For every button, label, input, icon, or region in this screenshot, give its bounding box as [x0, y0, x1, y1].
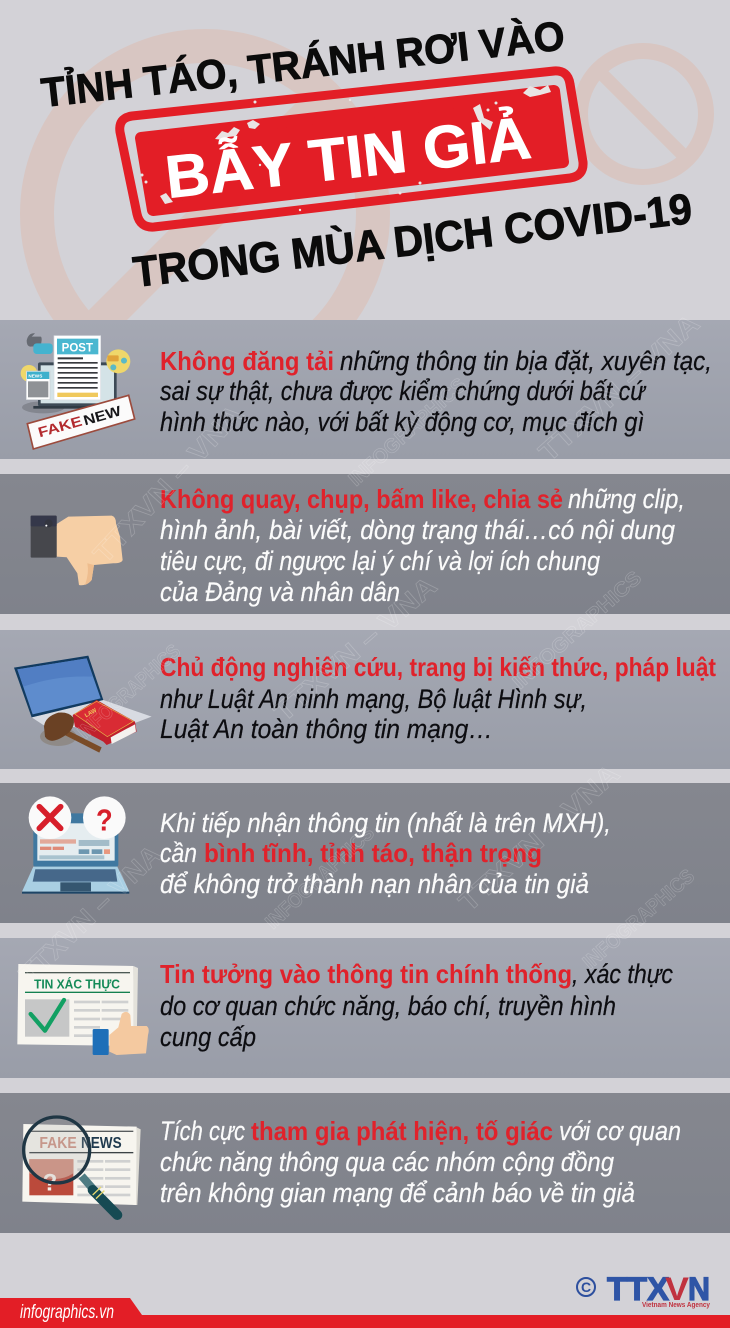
- watermarks: INFOGRAPHICS: [261, 822, 379, 934]
- panel 4 text: để không trở thành nạn nhân của tin giả: [160, 869, 589, 899]
- watermarks: INFOGRAPHICS: [345, 374, 471, 491]
- icon: X badge: [29, 796, 71, 839]
- watermarks: TTXVN – VNA: [268, 570, 443, 728]
- panel 5 text: Tin tưởng vào thông tin chính thống: [160, 959, 572, 989]
- watermarks: INFOGRAPHICS: [74, 640, 185, 744]
- icon: thumbs down: [31, 516, 123, 585]
- logo: TTXVN: N: [688, 1271, 710, 1307]
- icon: small prohibition sign: [580, 51, 706, 177]
- watermarks: INFOGRAPHICS: [509, 567, 646, 694]
- panel 2: no sharing: [0, 474, 730, 614]
- icon: fake news post: FAKE: [36, 413, 84, 440]
- red stamp: [120, 71, 583, 227]
- icon: magnifier over fake news paper: FAKE: [39, 1135, 77, 1152]
- panel 3 text: Luật An toàn thông tin mạng…: [160, 714, 493, 744]
- panel 2 text: hình ảnh, bài viết, dòng trạng thái…có nội dung: [160, 515, 675, 545]
- watermarks: TTXVN – VNA: [87, 399, 249, 569]
- panel 3 text: [160, 652, 716, 744]
- panel 2 text: những clip,: [568, 484, 685, 514]
- panel 6 text: tham gia phát hiện, tố giác: [251, 1116, 553, 1146]
- icon: verified newspaper with thumbs up: [17, 964, 149, 1055]
- stamp text: BẪY TIN GIẢ: [162, 104, 534, 211]
- logo: TTXVN: [577, 1271, 711, 1309]
- logo: TTXVN: TTX: [607, 1271, 670, 1307]
- icon: magnifier over fake news paper: ?: [43, 1170, 57, 1197]
- icon: question badge: ?: [96, 804, 113, 838]
- panel 6 text: chức năng thông qua các nhóm cộng đồng: [160, 1147, 614, 1177]
- logo: TTXVN: V: [665, 1271, 690, 1307]
- panel 4 text: bình tĩnh, tỉnh táo, thận trọng: [204, 838, 542, 868]
- icon: laptop, law book and gavel: LAW: [84, 707, 98, 719]
- icon: large prohibition sign: [37, 46, 373, 382]
- title line 1: TỈNH TÁO, TRÁNH RƠI VÀO: [39, 13, 567, 116]
- watermarks: [13, 308, 705, 989]
- panel 5 text: , xác thực: [572, 959, 673, 989]
- icon: magnifier over fake news paper: NEWS: [81, 1135, 122, 1152]
- panel 5 text: do cơ quan chức năng, báo chí, truyền hình: [160, 991, 616, 1021]
- icon: verified newspaper with thumbs up: TIN XÁC THỰC: [34, 976, 120, 991]
- title line 3: TRONG MÙA DỊCH COVID-19: [131, 184, 694, 297]
- watermarks: TTXVN – VNA: [13, 839, 167, 989]
- panel 6 text: với cơ quan: [559, 1116, 681, 1146]
- panel 1 text: [160, 346, 712, 437]
- panel 6: report fake news: [0, 1093, 730, 1233]
- header: title block: [20, 18, 714, 320]
- panel 6 text: trên không gian mạng để cảnh báo về tin giả: [160, 1178, 635, 1208]
- icon: laptop, law book and gavel: [14, 656, 152, 753]
- panel 2 text: tiêu cực, đi ngược lại ý chí và lợi ích chung: [160, 546, 600, 576]
- icon: magnifier over fake news paper: [22, 1117, 141, 1215]
- panel 1 text: hình thức nào, với bất kỳ động cơ, mục đích gì: [160, 407, 644, 437]
- panel 6 text: Tích cực: [160, 1116, 245, 1146]
- panel 2 text: [160, 484, 685, 607]
- icon: laptop with X and question mark: [22, 796, 129, 894]
- icon: fake news post: NEWS: [28, 373, 42, 378]
- panel 6 text: [160, 1116, 681, 1208]
- icon: fake news post: POST: [62, 341, 93, 354]
- logo: TTXVN: Vietnam News Agency: [642, 1300, 711, 1309]
- logo: TTXVN: C: [581, 1279, 591, 1295]
- panel 4 text: cần: [160, 838, 197, 868]
- panel 4 text: [160, 808, 611, 899]
- panel 4 text: Khi tiếp nhận thông tin (nhất là trên MXH),: [160, 808, 611, 838]
- panel 5 text: cung cấp: [160, 1022, 256, 1052]
- panel 3: study the law: [0, 630, 730, 769]
- panel 4: stay calm: [0, 783, 730, 923]
- watermarks: TTXVN – VNA: [453, 758, 625, 917]
- panel 5: trust official sources: [0, 938, 730, 1078]
- watermarks: INFOGRAPHICS: [579, 865, 699, 974]
- panel 3 text: như Luật An ninh mạng, Bộ luật Hình sự,: [160, 684, 587, 714]
- watermarks: TTXVN – VNA: [533, 308, 705, 467]
- footer bar with site name: [0, 1298, 730, 1328]
- site name: infographics.vn: [20, 1302, 114, 1323]
- icon: fake news post: [21, 333, 135, 449]
- panel 2 text: Không quay, chụp, bấm like, chia sẻ: [160, 484, 563, 514]
- icon: fake news post: NEW: [81, 402, 124, 428]
- panel 5 text: [160, 959, 673, 1052]
- panel 2 text: của Đảng và nhân dân: [160, 577, 400, 607]
- panel 1 text: Không đăng tải: [160, 346, 334, 376]
- panel 1: do not post: [0, 320, 730, 459]
- panel 1 text: sai sự thật, chưa được kiểm chứng dưới bất cứ: [160, 376, 647, 406]
